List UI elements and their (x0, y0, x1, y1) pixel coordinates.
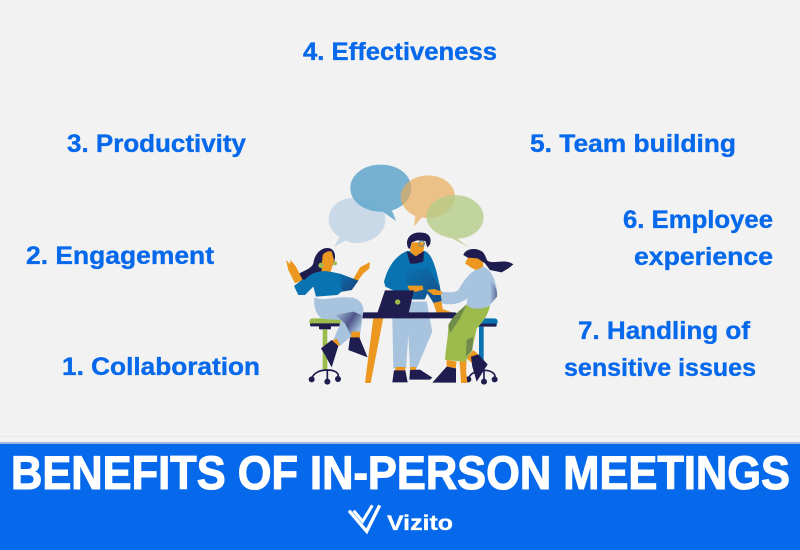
label: 6. Employee experience: experience (634, 243, 773, 271)
label: 7. Handling of sensitive issues: sensitive issues (564, 354, 756, 382)
person: woman on the right (427, 249, 513, 383)
left stool (309, 318, 341, 385)
person: woman on the left (286, 248, 370, 367)
wordmark: Vizito (387, 511, 453, 535)
label: 6. Employee experience (623, 206, 773, 271)
bottom banner (0, 442, 800, 550)
label: 4. Effectiveness: 4. Effectiveness (303, 38, 497, 66)
right stool (465, 318, 498, 385)
speech bubble: blue (350, 165, 411, 221)
illustration: three people talking at a table (286, 165, 513, 385)
speech bubble: pale blue (329, 198, 385, 247)
label: 7. Handling of sensitive issues: 7. Handling of (578, 317, 751, 345)
label: 2. Engagement: 2. Engagement (26, 242, 215, 270)
label: 5. Team building: 5. Team building (530, 130, 736, 158)
table and laptop (354, 290, 457, 318)
logo mark (349, 505, 380, 531)
label: 7. Handling of sensitive issues (564, 317, 756, 382)
speech bubble: orange (401, 175, 455, 226)
benefit labels (26, 38, 773, 382)
table legs (365, 318, 467, 383)
label: 6. Employee experience: 6. Employee (623, 206, 773, 234)
speech bubble: green (426, 195, 484, 247)
label: 3. Productivity: 3. Productivity (67, 130, 246, 158)
logo: Vizito (349, 505, 453, 535)
person: man in the middle (384, 232, 454, 382)
label: 1. Collaboration: 1. Collaboration (62, 353, 260, 381)
